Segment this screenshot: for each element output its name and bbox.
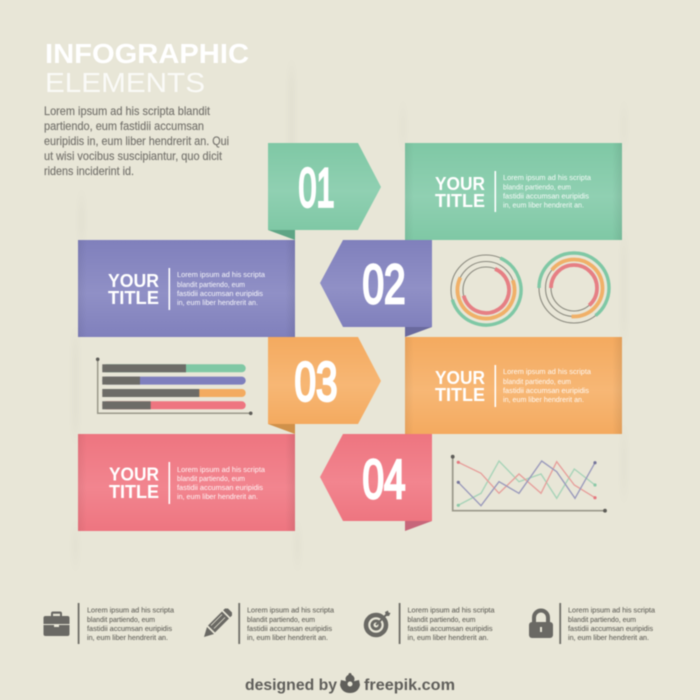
text block: orange: fastidii accumsan euripidis	[503, 386, 589, 395]
bottom text block 3	[399, 603, 495, 644]
text block: green	[503, 173, 592, 210]
heading: your title pink: TITLE	[109, 481, 159, 502]
footer credit	[245, 673, 455, 694]
bottom text block 1: blandit partiendo, eum	[87, 615, 155, 624]
text block: orange: in, eum liber hendrerit an.	[503, 395, 584, 404]
text block: pink	[177, 465, 266, 501]
panel: 01 green banner	[405, 143, 622, 240]
intro text block: Lorem ipsum ad his scripta blandit	[44, 105, 211, 118]
chart: left concentric rings	[440, 244, 532, 336]
footer credit: designed by	[245, 677, 337, 694]
icon: freepik logo	[340, 673, 360, 693]
bottom text block 1	[78, 603, 175, 644]
chart: right concentric rings	[534, 248, 614, 328]
heading: your title green: YOUR	[435, 173, 485, 194]
panel: 02 purple banner	[78, 240, 295, 337]
tag: 02	[320, 240, 432, 337]
icon: padlock	[529, 610, 553, 638]
text block: pink: fastidii accumsan euripidis	[177, 483, 263, 492]
intro text block: ridens inciderint id.	[44, 165, 134, 178]
intro text block: partiendo, eum fastidii accumsan	[44, 120, 204, 133]
heading: your title pink: YOUR	[109, 464, 159, 484]
bottom text block 4: blandit partiendo, eum	[568, 615, 636, 624]
bottom text block 4	[559, 603, 656, 644]
text block: green: in, eum liber hendrerit an.	[503, 200, 584, 210]
title: INFOGRAPHIC	[45, 38, 249, 69]
heading: your title pink	[109, 464, 159, 502]
panel: 03 orange banner	[405, 337, 622, 434]
bottom text block 2: in, eum liber hendrerit an.	[247, 633, 328, 642]
title: ELEMENTS	[45, 67, 205, 98]
tag: 01	[268, 143, 381, 240]
heading: your title orange: TITLE	[435, 384, 485, 405]
text block: green: Lorem ipsum ad his scripta	[503, 173, 592, 182]
bottom text block 3: fastidii accumsan euripidis	[408, 624, 493, 633]
text block: purple: Lorem ipsum ad his scripta	[177, 270, 266, 279]
intro text block: ut wisi vocibus suscipiantur, quo dicit	[44, 150, 223, 163]
tag: 04	[320, 434, 432, 531]
text block: green: fastidii accumsan euripidis	[503, 192, 589, 200]
bottom text block 1: fastidii accumsan euripidis	[87, 624, 172, 633]
bottom text block 4: in, eum liber hendrerit an.	[568, 633, 649, 642]
bottom text block 3: blandit partiendo, eum	[408, 615, 476, 624]
tag: 04: 04	[362, 448, 406, 510]
bottom text block 2: Lorem ipsum ad his scripta	[247, 606, 335, 614]
bottom text block 2: fastidii accumsan euripidis	[247, 624, 332, 633]
text block: green: blandit partiendo, eum	[503, 182, 571, 192]
bottom text block 4: fastidii accumsan euripidis	[568, 624, 653, 633]
bottom text block 4: Lorem ipsum ad his scripta	[568, 606, 656, 614]
intro text block	[44, 105, 229, 178]
heading: your title purple: YOUR	[108, 270, 159, 291]
bottom text block 2: blandit partiendo, eum	[247, 615, 315, 624]
footer credit: freepik.com	[364, 677, 455, 694]
bottom text block 1: in, eum liber hendrerit an.	[87, 633, 168, 642]
icon: target	[366, 610, 390, 635]
text block: purple	[177, 270, 266, 307]
heading: your title green: TITLE	[435, 190, 485, 211]
intro text block: euripidis in, eum liber hendrerit an. Qui	[44, 135, 229, 148]
heading: your title green	[435, 173, 485, 211]
text block: purple: blandit partiendo, eum	[177, 280, 245, 289]
bottom text block 2	[238, 603, 335, 644]
tag: 03	[268, 337, 381, 434]
text block: orange: Lorem ipsum ad his scripta	[503, 367, 592, 376]
text block: pink: in, eum liber hendrerit an.	[177, 492, 258, 501]
text block: orange: blandit partiendo, eum	[503, 377, 571, 386]
title	[45, 38, 249, 98]
text block: pink: Lorem ipsum ad his scripta	[177, 465, 266, 474]
bottom text block 3: Lorem ipsum ad his scripta	[408, 606, 495, 614]
bottom text block 1: Lorem ipsum ad his scripta	[87, 606, 175, 614]
tag: 03: 03	[294, 350, 338, 412]
bottom text block 3: in, eum liber hendrerit an.	[408, 633, 488, 642]
heading: your title orange: YOUR	[435, 367, 485, 388]
icon: briefcase	[44, 612, 70, 636]
panel: 04 pink banner	[78, 434, 295, 531]
tag: 02: 02	[362, 253, 406, 315]
chart: line chart	[451, 455, 607, 513]
heading: your title purple: TITLE	[108, 287, 159, 308]
text block: orange	[503, 367, 592, 404]
heading: your title purple	[108, 270, 159, 308]
text block: pink: blandit partiendo, eum	[177, 474, 245, 483]
chart: horizontal bars	[96, 358, 252, 415]
tag: 01: 01	[298, 156, 334, 218]
icon: pencil	[204, 608, 232, 637]
heading: your title orange	[435, 367, 485, 405]
text block: purple: fastidii accumsan euripidis	[177, 289, 263, 298]
text block: purple: in, eum liber hendrerit an.	[177, 298, 258, 307]
